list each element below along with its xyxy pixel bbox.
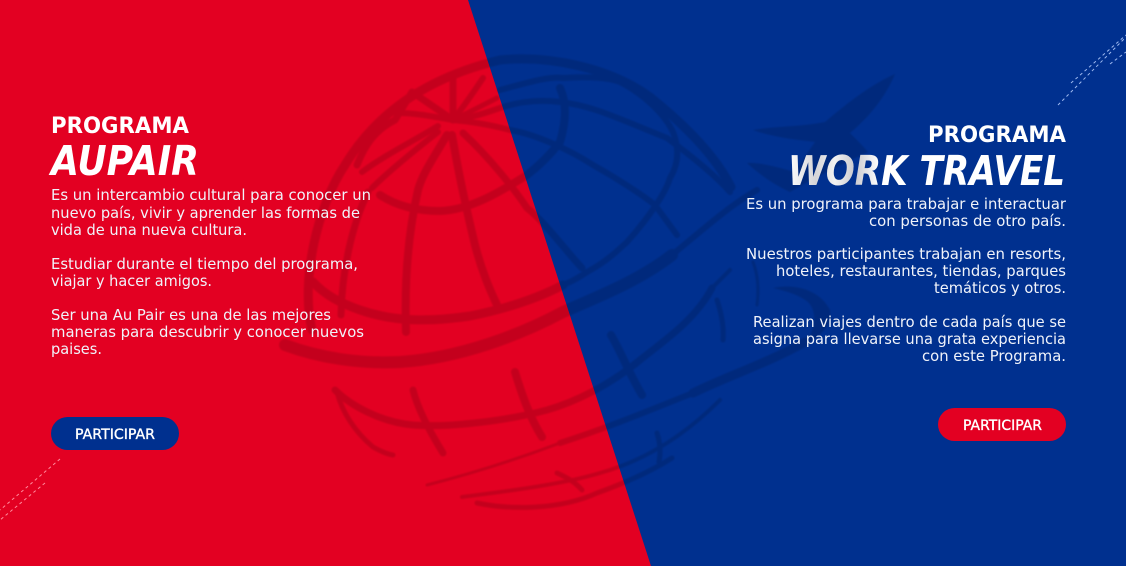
text block: Work Travel description: con este Programa. — [922, 347, 1066, 365]
dashed accent lines top right — [1058, 35, 1126, 105]
text block: AuPair description: Es un intercambio cultural para conocer un — [51, 186, 371, 204]
heading: Work Travel: WORK TRAVEL — [788, 147, 1065, 195]
text block: Work Travel description: asigna para llevarse una grata experiencia — [753, 330, 1066, 348]
heading: AuPair: AUPAIR — [48, 137, 199, 185]
icon: globe with planes watermark — [285, 59, 895, 507]
dashed accent lines bottom left — [0, 459, 60, 520]
text block: Work Travel description: con personas de otro país. — [869, 212, 1066, 230]
button: participar right: PARTICIPAR — [963, 418, 1042, 434]
text block: AuPair description: vida de una nueva cultura. — [51, 221, 247, 239]
text block: AuPair description: viajar y hacer amigos. — [51, 272, 212, 290]
panel: blue right background — [468, 0, 1126, 566]
button: participar right — [938, 408, 1066, 441]
text block: AuPair description: paises. — [51, 340, 102, 358]
heading: Programa left: PROGRAMA — [51, 114, 189, 139]
button: participar left: PARTICIPAR — [75, 427, 155, 443]
text block: Work Travel description: Nuestros participantes trabajan en resorts, — [746, 245, 1066, 263]
text block: AuPair description — [51, 186, 371, 358]
text block: Work Travel description — [746, 195, 1067, 365]
text block: Work Travel description: Es un programa para trabajar e interactuar — [746, 195, 1067, 213]
text block: AuPair description: nuevo país, vivir y aprender las formas de — [51, 204, 360, 222]
panel: Work Travel program — [746, 123, 1067, 441]
heading: Programa right: PROGRAMA — [928, 123, 1066, 148]
text block: AuPair description: maneras para descubrir y conocer nuevos — [51, 323, 364, 341]
button: participar left — [51, 417, 179, 450]
text block: AuPair description: Estudiar durante el tiempo del programa, — [51, 255, 358, 273]
text block: AuPair description: Ser una Au Pair es una de las mejores — [51, 306, 331, 324]
panel: AuPair program — [48, 114, 371, 450]
text block: Work Travel description: temáticos y otros. — [934, 279, 1066, 297]
text block: Work Travel description: hoteles, restaurantes, tiendas, parques — [776, 262, 1066, 280]
text block: Work Travel description: Realizan viajes dentro de cada país que se — [753, 313, 1066, 331]
